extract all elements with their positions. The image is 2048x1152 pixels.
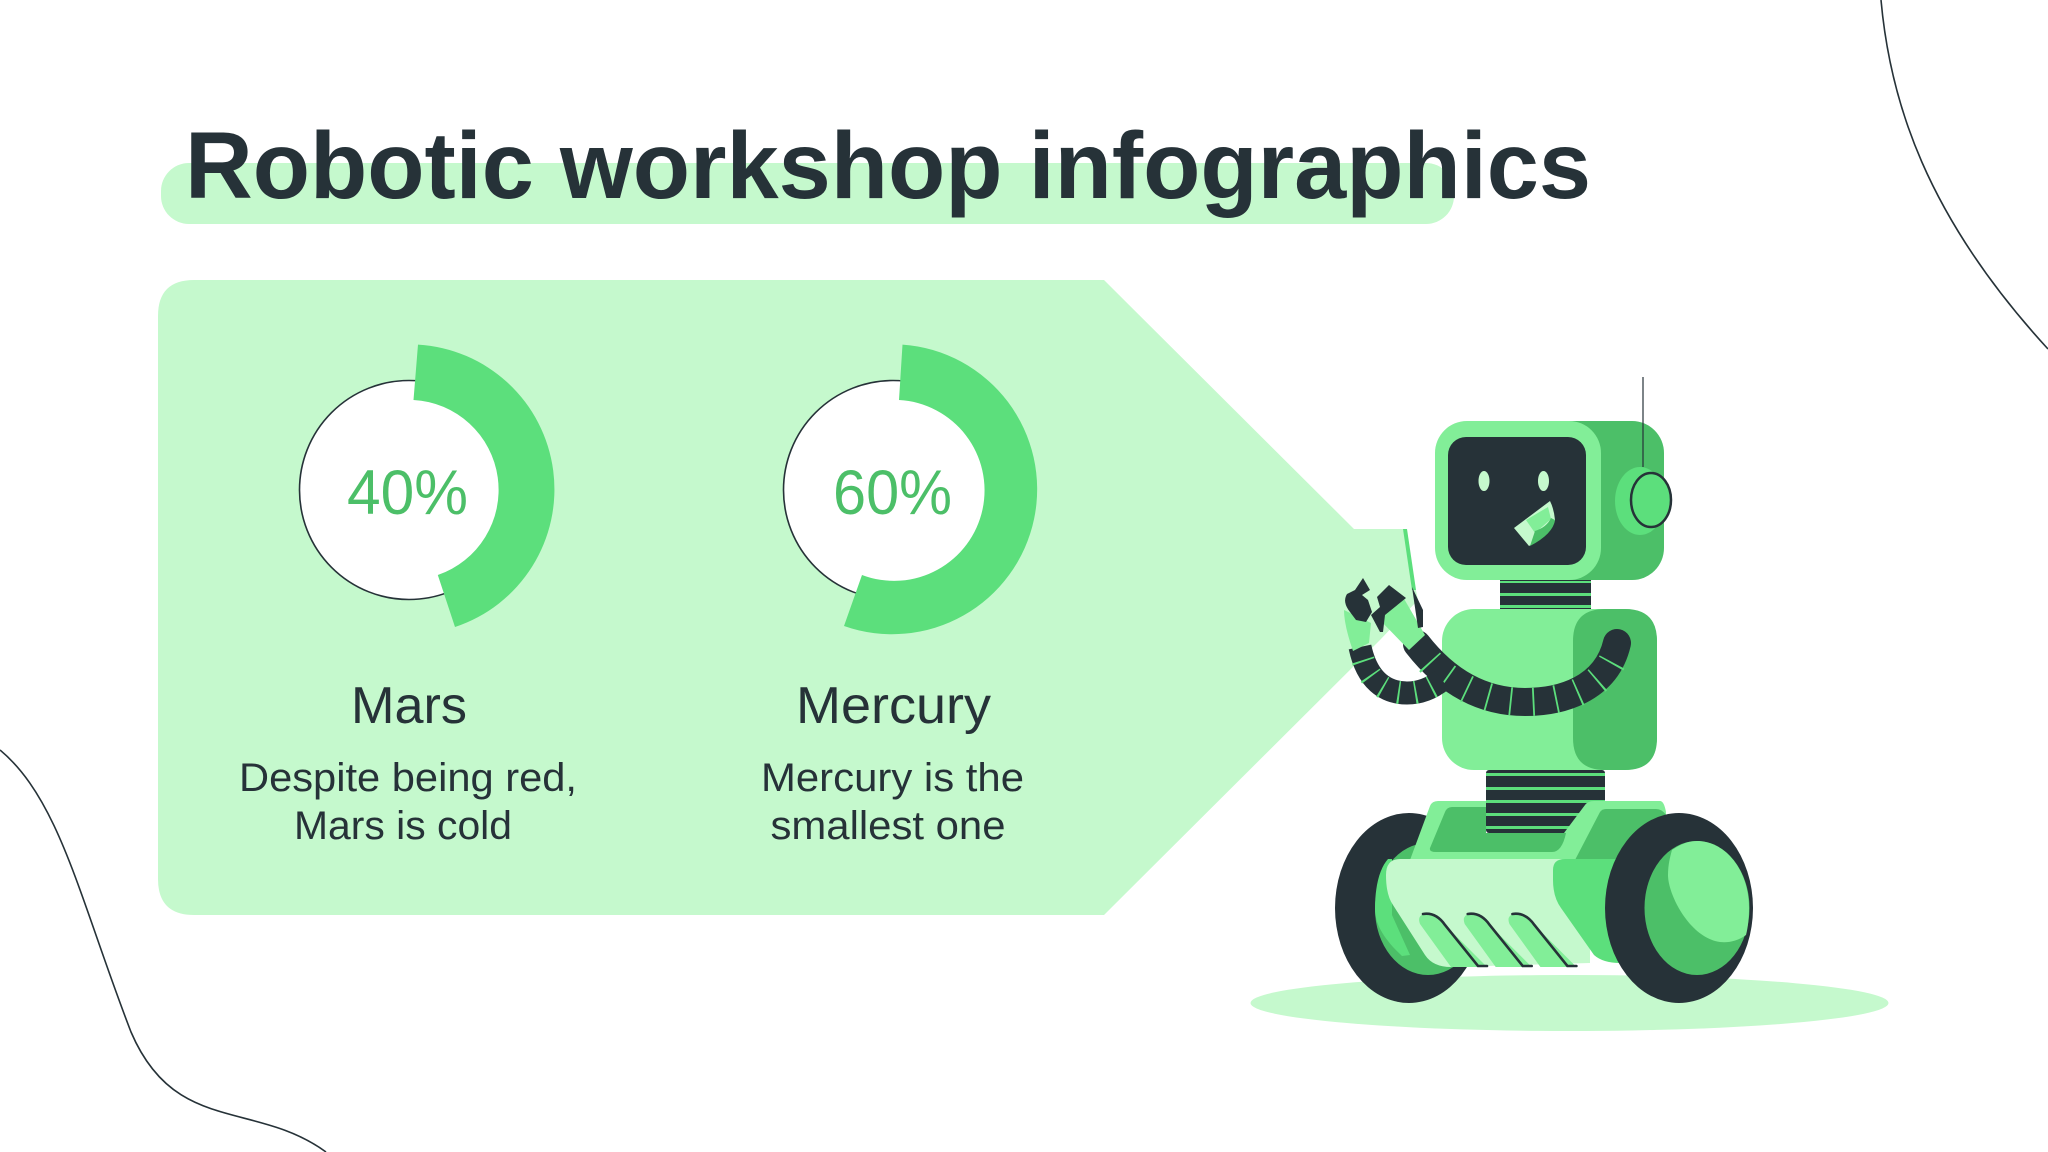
donut chart: Mercury 60% [784,345,1037,634]
text block: Mercury [761,677,1024,848]
robot lower arm [1360,647,1442,693]
ground shadow [1250,975,1888,1031]
screen face [1448,437,1586,565]
lower neck [1486,770,1605,833]
body [1442,609,1657,770]
text block: Mars: Despite being red, [239,756,577,800]
icon: robot illustration [1250,377,1888,1031]
neck [1500,580,1591,610]
forearms and hand [1344,578,1425,651]
donut chart: Mars 40% [300,345,554,627]
text block: Mars [239,677,577,848]
donut chart: Mars 40%: 40% [347,458,468,528]
text block: Mercury: smallest one [770,804,1006,848]
eyes [1478,471,1490,491]
tablet edge [1403,529,1416,590]
donut chart: Mercury 60%: 60% [833,458,952,528]
wheel base upper housing [1410,801,1666,860]
robot left arm upper [1417,643,1617,702]
head [1435,377,1671,580]
text block: Mars: Mars is cold [294,804,512,848]
ear [1615,467,1665,535]
text block: Mercury: Mercury [796,677,991,735]
wheel base body [1386,859,1640,967]
text block: Mercury: Mercury is the [761,756,1024,800]
mouth [1514,501,1555,546]
antenna [1642,377,1644,467]
title: Robotic workshop infographics [185,113,1591,219]
base vents [1419,914,1576,967]
right wheel [1605,813,1753,1003]
panel: callout pointing at robot tablet [158,280,1418,915]
left wheel [1335,813,1483,1003]
title highlight [161,163,1454,224]
text block: Mars: Mars [351,677,467,735]
